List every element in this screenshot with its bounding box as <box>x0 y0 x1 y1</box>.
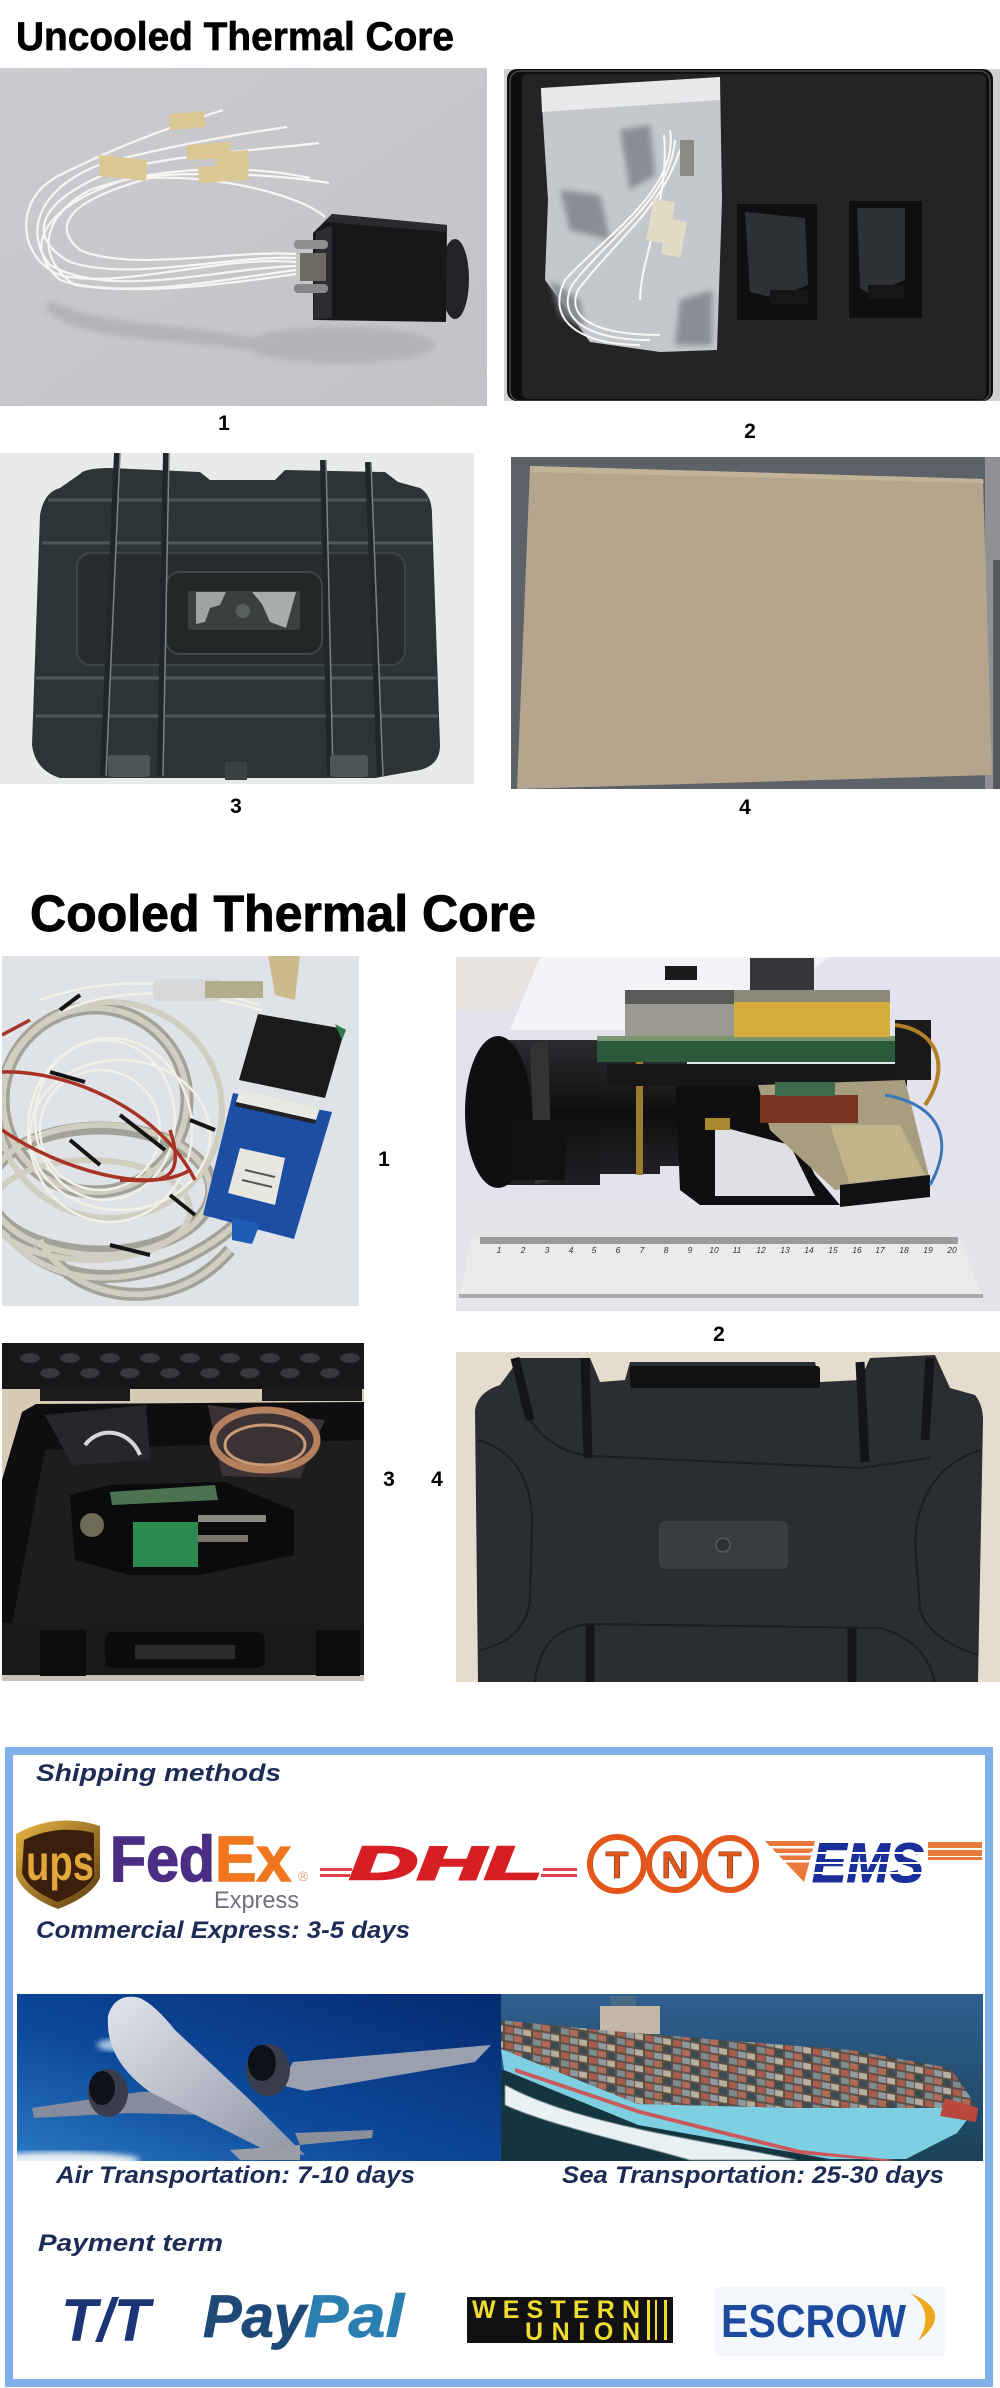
silver module <box>625 1004 734 1036</box>
core in foam <box>70 1482 294 1575</box>
panel: uncooled photo 1, core with wires <box>0 68 487 406</box>
adapter strain relief <box>232 1218 260 1244</box>
panel: uncooled photo 3, closed hard case <box>0 453 474 784</box>
ruler: 10 <box>709 1245 719 1255</box>
number: cooled 1: 1 <box>378 1148 390 1171</box>
logo: Western Union: WESTERN <box>472 2296 640 2324</box>
logo: TNT: T <box>605 1845 629 1887</box>
logo: T/T: T/T <box>61 2287 154 2354</box>
tan connector <box>268 955 300 1000</box>
top components <box>750 958 814 990</box>
recessed panel <box>77 553 405 665</box>
handle and latches <box>2 1623 364 1681</box>
logo: PayPal <box>203 2283 405 2350</box>
water wake <box>505 2085 798 2160</box>
clouds <box>0 2152 140 2168</box>
number: uncooled 2: 2 <box>744 420 756 443</box>
text: commercial express: Commercial Express: 3-5 days <box>36 1917 410 1944</box>
handle <box>630 1366 820 1388</box>
ruler: 12 <box>756 1245 766 1255</box>
logo: TNT <box>590 1837 756 1891</box>
black mount bracket <box>676 1086 840 1205</box>
logo: EMS: EMS <box>812 1831 924 1894</box>
cameras in foam <box>745 208 905 304</box>
panel: uncooled photo 2, foam case with bag <box>504 69 1000 401</box>
panel: cooled photo 4, closed case <box>456 1352 1000 1682</box>
heading: payment term: Payment term <box>38 2230 223 2257</box>
ruler: 4 <box>569 1245 574 1255</box>
ruler: 8 <box>664 1245 669 1255</box>
ruler: 6 <box>616 1245 621 1255</box>
frame <box>9 1751 989 2383</box>
number: uncooled 3: 3 <box>230 795 242 818</box>
logo: TNT: N <box>661 1845 689 1887</box>
container stacks <box>501 2020 978 2108</box>
ruler: 18 <box>899 1245 909 1255</box>
photo: container ship at sea <box>501 1994 983 2161</box>
lens barrel <box>500 1040 600 1185</box>
logo: FedEx Express: Express <box>214 1887 299 1914</box>
bottom left water <box>501 2070 830 2161</box>
cooler assembly <box>758 1080 930 1190</box>
upper black plate <box>607 1064 907 1086</box>
focus gear <box>530 1040 552 1185</box>
center label plate <box>659 1521 788 1569</box>
torn label <box>188 591 300 630</box>
latches <box>108 755 150 777</box>
near wing <box>32 2090 205 2118</box>
cardboard <box>517 466 992 789</box>
lid contour lines <box>478 1400 980 1682</box>
ruler: 20 <box>946 1245 957 1255</box>
ruler: 17 <box>875 1245 885 1255</box>
foam <box>522 74 986 399</box>
USB plug <box>153 979 223 1001</box>
number: cooled 4: 4 <box>431 1468 443 1491</box>
green circuit boards <box>597 1041 895 1062</box>
ruler: 5 <box>592 1245 597 1255</box>
adapter label <box>228 1148 285 1205</box>
core body <box>313 214 447 322</box>
black foam block <box>239 1014 345 1098</box>
text: air transportation: Air Transportation: 7-10 days <box>55 2162 415 2189</box>
logo: FedEx Express: Ex <box>215 1823 291 1895</box>
ruler: 3 <box>545 1245 550 1255</box>
ruler: 15 <box>828 1245 838 1255</box>
connector plate <box>313 225 332 320</box>
number: uncooled 4: 4 <box>739 796 751 819</box>
panel: shipping and payment <box>0 1751 989 2383</box>
number: cooled 2: 2 <box>713 1323 725 1346</box>
case interior <box>2 1402 364 1640</box>
title: uncooled thermal core: Uncooled Thermal Core <box>16 15 454 59</box>
logo: PayPal: Pal <box>304 2283 405 2350</box>
bagged wires <box>559 130 680 345</box>
logo: Western Union: UNION <box>525 2318 640 2346</box>
logo: UPS: ups <box>26 1835 94 1891</box>
logo: DHL: DHL <box>350 1837 542 1889</box>
ruler: 13 <box>780 1245 790 1255</box>
logo: DHL <box>320 1837 577 1889</box>
ruler <box>459 1237 983 1298</box>
ruler: 16 <box>852 1245 862 1255</box>
logo: EMS <box>765 1831 982 1894</box>
logo: Escrow: ESCROW <box>721 2295 907 2347</box>
panel: cooled photo 2, cooled camera with ruler <box>456 957 1000 1311</box>
red and black wires <box>2 1020 195 1181</box>
heading: shipping methods: Shipping methods <box>36 1760 281 1787</box>
logo: UPS <box>16 1821 100 1909</box>
far wing <box>280 2045 491 2091</box>
shadows on table <box>45 300 435 363</box>
logo: TNT: T <box>718 1845 742 1887</box>
lens barrel <box>446 239 469 319</box>
title: cooled thermal core: Cooled Thermal Core <box>30 885 536 942</box>
photo: airplane in flight <box>0 1994 501 2168</box>
fuselage <box>108 1997 305 2155</box>
ruler: 14 <box>804 1245 814 1255</box>
logo: Escrow <box>715 2287 945 2356</box>
lid foam <box>2 1343 364 1389</box>
case body <box>32 468 440 778</box>
bridge tower <box>600 2006 660 2034</box>
ruler: 7 <box>640 1245 645 1255</box>
ruler: 11 <box>733 1245 742 1255</box>
hull <box>501 2049 976 2159</box>
straps <box>515 1358 930 1682</box>
logo: FedEx Express: ® <box>298 1868 309 1884</box>
ruler: 9 <box>688 1245 693 1255</box>
tape tags <box>99 111 249 183</box>
gold module <box>734 1000 890 1037</box>
ruler: 19 <box>923 1245 933 1255</box>
zip bag <box>541 77 722 352</box>
logo: PayPal: Pay <box>203 2283 309 2350</box>
blue adapter box <box>203 1093 332 1239</box>
panel: uncooled photo 4, cardboard box <box>511 457 1000 789</box>
camera cutouts <box>737 204 817 320</box>
body ridges <box>36 500 438 716</box>
panel: cooled photo 3, open case with core <box>2 1343 364 1681</box>
straps <box>103 453 380 776</box>
case hinge band <box>40 1389 130 1401</box>
bow red edge <box>940 2098 978 2122</box>
accessory bags <box>45 1405 150 1465</box>
ruler: 2 <box>520 1245 526 1255</box>
logo: FedEx Express: Fed <box>110 1823 215 1895</box>
wires <box>26 110 329 289</box>
ruler: 1 <box>497 1245 502 1255</box>
silver cable loops <box>0 1008 240 1294</box>
number: cooled 3: 3 <box>383 1468 395 1491</box>
logo: FedEx Express <box>110 1823 309 1914</box>
tailplane <box>295 2130 373 2145</box>
panel: cooled photo 1, cables and blue adapter <box>0 955 359 1306</box>
logo: Western Union <box>467 2296 673 2346</box>
number: uncooled 1: 1 <box>218 412 230 435</box>
case body <box>475 1355 983 1682</box>
engines <box>246 2044 290 2096</box>
text: sea transportation: Sea Transportation: 25-30 days <box>562 2162 944 2189</box>
